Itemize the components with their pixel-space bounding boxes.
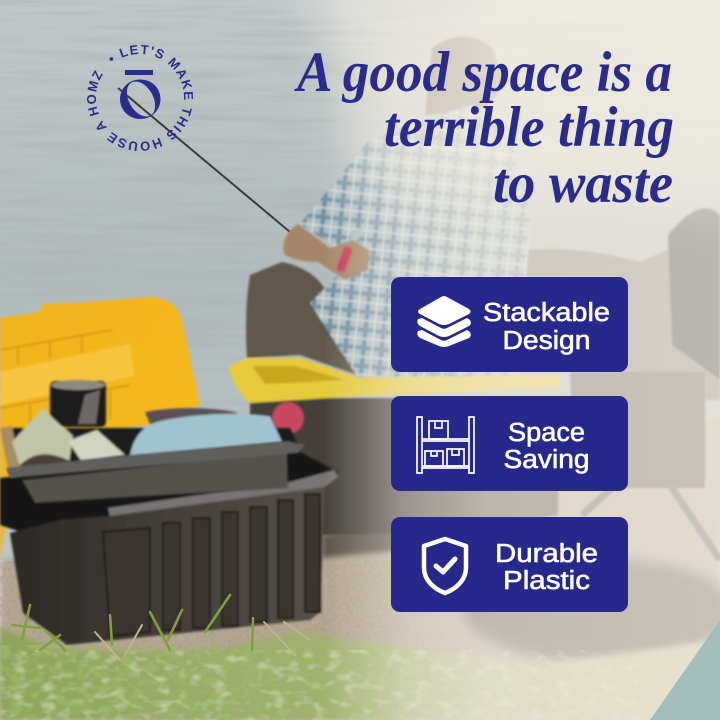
back bin with yellow lid xyxy=(228,358,560,535)
label: space saving xyxy=(504,419,590,474)
label: space saving: Space xyxy=(508,419,585,447)
label: stackable design: Design xyxy=(502,327,590,355)
yellow open lid xyxy=(0,297,200,560)
bin interior xyxy=(0,445,338,535)
sandy ground xyxy=(0,420,720,720)
large front bin xyxy=(0,445,338,645)
circular slogan text xyxy=(96,54,184,142)
label: stackable design xyxy=(483,299,610,355)
thermos xyxy=(50,380,106,427)
bin rim xyxy=(108,470,338,516)
grass foreground xyxy=(0,595,720,720)
trousers xyxy=(246,262,360,376)
chair shadow on sand xyxy=(465,558,720,662)
pale wash behind title xyxy=(300,0,720,200)
badge: stackable design xyxy=(391,277,628,372)
tray bin on top xyxy=(6,441,305,503)
logo letter O xyxy=(120,80,160,119)
badge: durable plastic xyxy=(391,517,628,612)
folding camp chair xyxy=(495,208,720,560)
fishing rod xyxy=(118,88,290,232)
shirt sleeve xyxy=(300,140,388,250)
label: durable plastic: Durable xyxy=(495,540,598,568)
label: stackable design: Stackable xyxy=(483,299,610,327)
forearm and hand xyxy=(283,224,370,280)
title heading: A good space is a xyxy=(294,41,672,104)
teal corner tarp xyxy=(650,620,720,720)
lake water xyxy=(0,0,720,560)
contents: tackle boxes and towel xyxy=(0,408,300,480)
label: durable plastic: Plastic xyxy=(503,567,590,595)
title heading: terrible thing xyxy=(384,96,674,159)
reel handle xyxy=(336,245,353,273)
title heading: to waste xyxy=(493,152,673,215)
logo bar xyxy=(125,70,153,75)
bin recessed panels xyxy=(103,494,320,636)
title heading xyxy=(294,41,674,215)
icon: shield with check xyxy=(424,539,466,593)
icon: stacked layers xyxy=(417,296,471,347)
label: space saving: Saving xyxy=(504,446,590,474)
red reel xyxy=(272,402,304,434)
head and cap xyxy=(425,36,503,115)
circular brand logo: • LET'S MAKE THIS HOUSE A HOMZ xyxy=(86,44,194,151)
fisherman xyxy=(246,36,530,380)
shadow under back bin xyxy=(322,522,402,558)
badge: space saving xyxy=(391,396,628,491)
icon: warehouse shelf with boxes xyxy=(417,417,474,473)
plaid shirt torso xyxy=(310,105,530,380)
label: durable plastic xyxy=(495,540,598,595)
bin body xyxy=(10,485,325,645)
